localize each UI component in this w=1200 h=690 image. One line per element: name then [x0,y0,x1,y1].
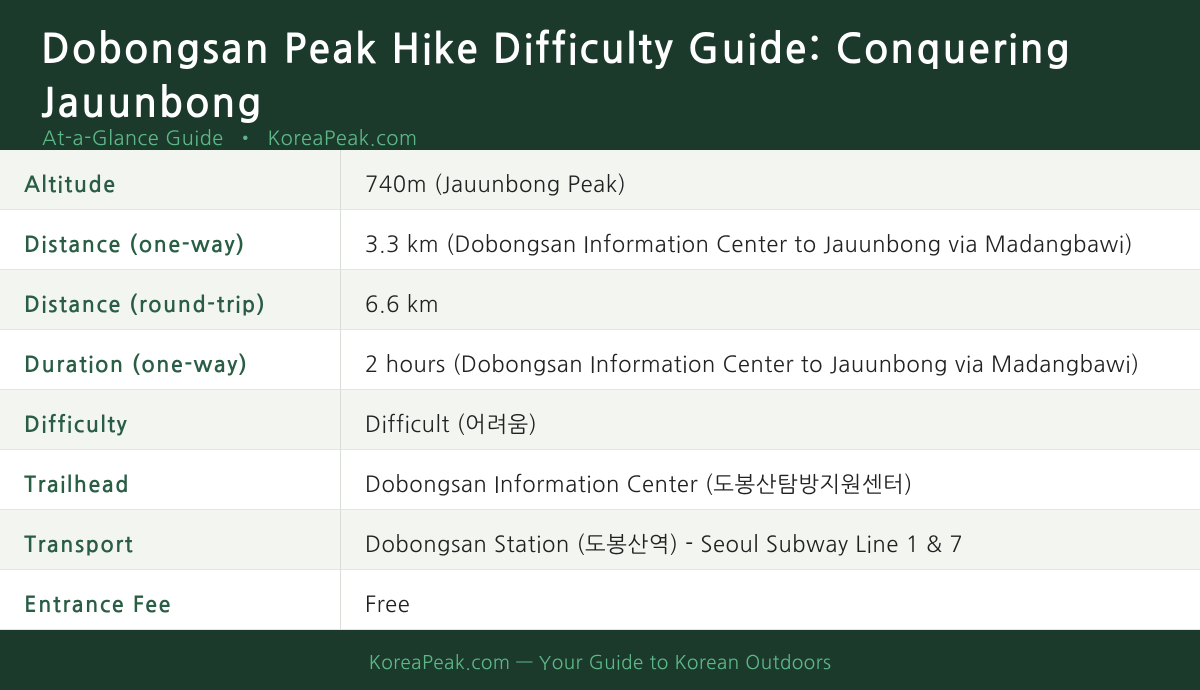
row: altitude: Altitude [24,174,116,196]
row: distance one-way: 3.3 km (Dobongsan Information Center to Jauunbong via Madangbawi) [365,234,1133,256]
row: difficulty [0,390,1200,450]
row: trailhead [0,450,1200,510]
row: duration: 2 hours (Dobongsan Information Center to Jauunbong via Madangbawi) [365,354,1140,376]
footer: KoreaPeak.com — Your Guide to Korean Outdoors [369,653,831,672]
title: Dobongsan Peak Hike Difficulty Guide: Conquering Jauunbong [41,29,1072,123]
row: distance one-way: Distance (one-way) [24,234,245,256]
subtitle: At-a-Glance Guide • KoreaPeak.com [42,128,418,148]
row: entrance fee: Entrance Fee [24,594,172,616]
row: transport: Dobongsan Station (도봉산역) - Seoul Subway Line 1 & 7 [365,534,963,556]
row: trailhead: Trailhead [24,474,130,496]
row: duration [0,330,1200,390]
info table [0,150,1200,630]
row: entrance fee: Free [365,594,410,616]
footer [0,630,1200,690]
row: distance one-way [0,210,1200,270]
row: difficulty: Difficulty [24,414,128,436]
row: distance round-trip [0,270,1200,330]
header [0,0,1200,150]
row: trailhead: Dobongsan Information Center (도봉산탐방지원센터) [365,474,913,496]
row: entrance fee [0,570,1200,630]
row: transport [0,510,1200,570]
row: duration: Duration (one-way) [24,354,248,376]
row: altitude [0,150,1200,210]
row: distance round-trip: Distance (round-trip) [24,294,266,316]
row: difficulty: Difficult (어려움) [365,414,537,436]
row: altitude: 740m (Jauunbong Peak) [365,174,626,196]
row: distance round-trip: 6.6 km [365,294,439,316]
row: transport: Transport [24,534,134,556]
